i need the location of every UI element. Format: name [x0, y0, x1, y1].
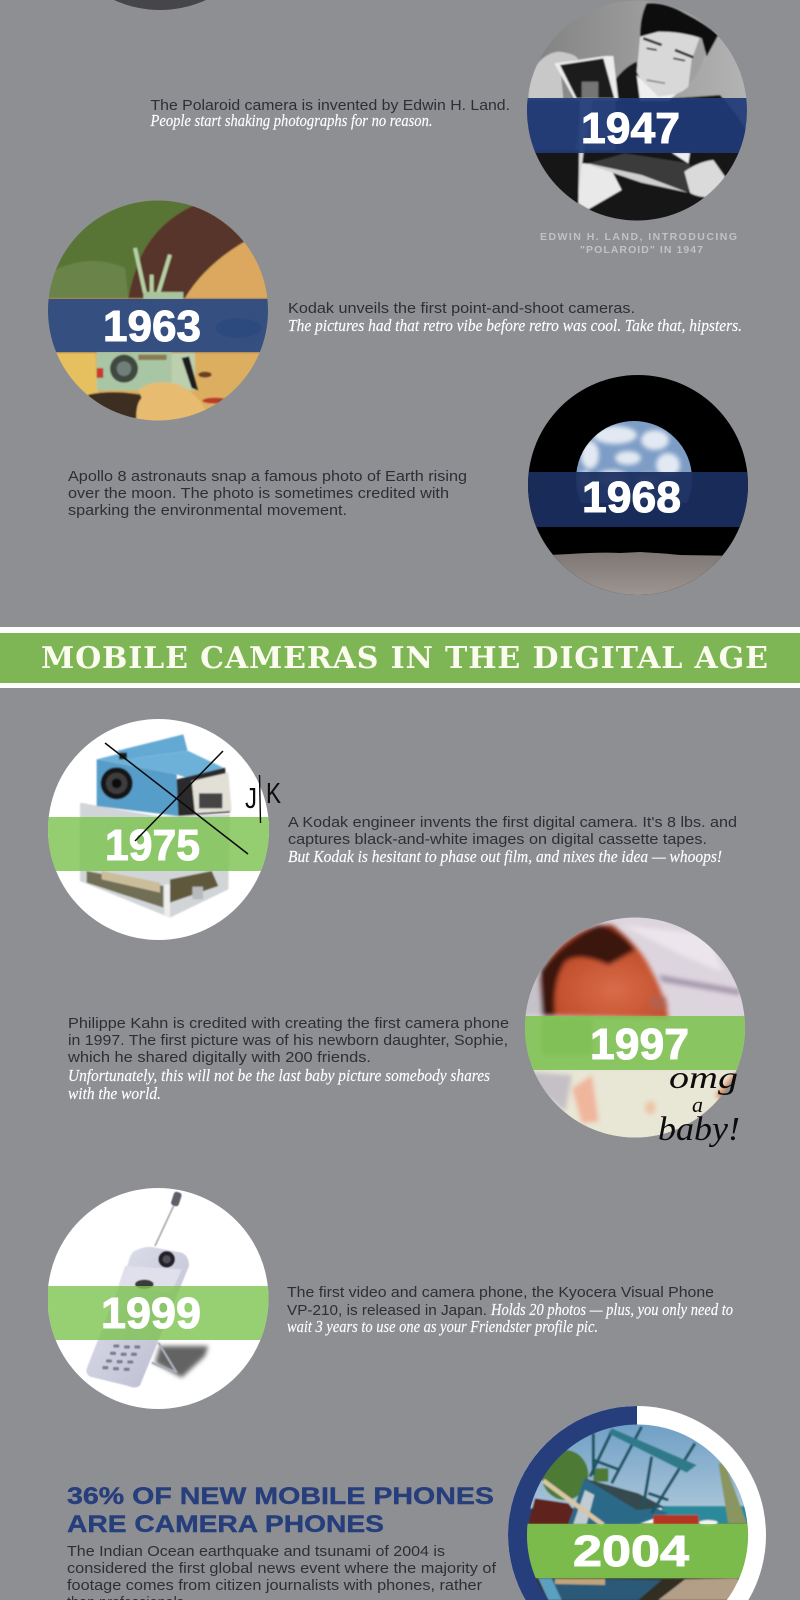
photo caption: EDWIN H. LAND, INTRODUCING	[540, 231, 737, 243]
timeline entry: 1975 first digital camera	[48, 719, 737, 940]
handwritten note: JK: K	[266, 778, 282, 810]
description: which he shared digitally with 200 friends.	[67, 1050, 371, 1066]
year band	[48, 1286, 269, 1340]
description: Apollo 8 astronauts snap a famous photo of Earth rising	[68, 469, 467, 485]
year label: 1968	[582, 473, 681, 522]
handwritten note: omg a baby: baby!	[658, 1111, 740, 1148]
photo: Kodak digital camera prototype	[48, 719, 269, 940]
timeline entry: 1999 Kyocera Visual Phone	[48, 1188, 733, 1409]
year label: 1997	[590, 1020, 689, 1069]
photo caption	[540, 231, 737, 256]
photo caption: "POLAROID" IN 1947	[580, 244, 703, 256]
description: But Kodak is hesitant to phase out film, and nixes the idea — whoops!	[288, 847, 722, 866]
description: captures black-and-white images on digital cassette tapes.	[288, 832, 707, 848]
photo: Kyocera VP-210 phone	[48, 1188, 269, 1409]
description	[68, 469, 467, 519]
description: The first video and camera phone, the Kyocera Visual Phone	[287, 1285, 714, 1301]
description: Philippe Kahn is credited with creating the first camera phone	[68, 1016, 509, 1032]
timeline entry: 1997 first camera phone	[67, 915, 747, 1162]
handwritten note: JK: J	[245, 783, 257, 815]
year band	[528, 472, 748, 527]
section banner	[0, 627, 800, 688]
year band	[48, 817, 269, 871]
timeline entry: 1963 Kodak point-and-shoot	[45, 198, 742, 423]
description: The pictures had that retro vibe before retro was cool. Take that, hipsters.	[288, 316, 742, 335]
description: Holds 20 photos — plus, you only need to	[490, 1300, 733, 1319]
donut chart: 36% camera phones	[508, 1406, 766, 1600]
description	[150, 98, 510, 130]
description: footage comes from citizen journalists with phones, rather	[67, 1578, 482, 1594]
year band	[527, 1524, 748, 1578]
description	[288, 815, 737, 866]
description: People start shaking photographs for no reason.	[150, 111, 432, 130]
description: with the world.	[68, 1084, 161, 1103]
description	[288, 301, 742, 335]
cropped photo circle from previous section	[50, 0, 270, 10]
year label: 1963	[103, 302, 201, 351]
moon surface	[553, 552, 722, 595]
year label: 1999	[101, 1289, 201, 1338]
description: in 1997. The first picture was of his newborn daughter, Sophie,	[68, 1033, 508, 1049]
description: The Polaroid camera is invented by Edwin H. Land.	[150, 98, 510, 114]
stat heading	[67, 1483, 494, 1538]
description: A Kodak engineer invents the first digital camera. It's 8 lbs. and	[288, 815, 737, 831]
description: considered the first global news event where the majority of	[67, 1561, 497, 1577]
year label: 1947	[581, 104, 680, 153]
description: Kodak unveils the first point-and-shoot cameras.	[288, 301, 635, 317]
description	[287, 1285, 733, 1336]
description: VP-210, is released in Japan.	[287, 1303, 487, 1319]
handwritten note: omg a baby: a	[692, 1092, 703, 1117]
photo: Edwin Land with Polaroid print	[525, 0, 752, 225]
timeline entry: 1947 Polaroid	[150, 0, 752, 256]
description: The Indian Ocean earthquake and tsunami of 2004 is	[67, 1544, 445, 1560]
description	[67, 1016, 509, 1103]
year label: 2004	[573, 1527, 690, 1576]
year band	[527, 98, 748, 153]
photo: woman with Kodak Instamatic	[45, 198, 272, 423]
handwritten note: omg a baby: omg	[669, 1059, 738, 1095]
description: sparking the environmental movement.	[68, 503, 347, 519]
year label: 1975	[105, 821, 200, 870]
year band	[525, 1016, 745, 1070]
crossed-out X	[105, 743, 248, 854]
year band	[48, 299, 268, 352]
description: wait 3 years to use one as your Friendster profile pic.	[287, 1317, 598, 1336]
description	[67, 1544, 497, 1600]
photo: boat wrecked by tsunami	[525, 1423, 752, 1600]
description: Unfortunately, this will not be the last baby picture somebody shares	[68, 1066, 490, 1085]
earth	[576, 421, 692, 503]
stat heading: ARE CAMERA PHONES	[67, 1511, 384, 1538]
stat heading: 36% OF NEW MOBILE PHONES	[67, 1483, 494, 1510]
handwritten note: JK	[245, 775, 282, 823]
description: over the moon. The photo is sometimes credited with	[68, 486, 449, 502]
photo: Earth rising over the moon	[528, 375, 748, 600]
timeline entry: 1968 Earthrise	[68, 375, 748, 600]
photo: newborn baby Sophie	[525, 918, 745, 1138]
timeline entry: 2004 camera phones and tsunami	[67, 1406, 766, 1600]
handwritten note: omg a baby	[658, 1059, 740, 1148]
banner heading: MOBILE CAMERAS IN THE DIGITAL AGE	[41, 641, 768, 676]
